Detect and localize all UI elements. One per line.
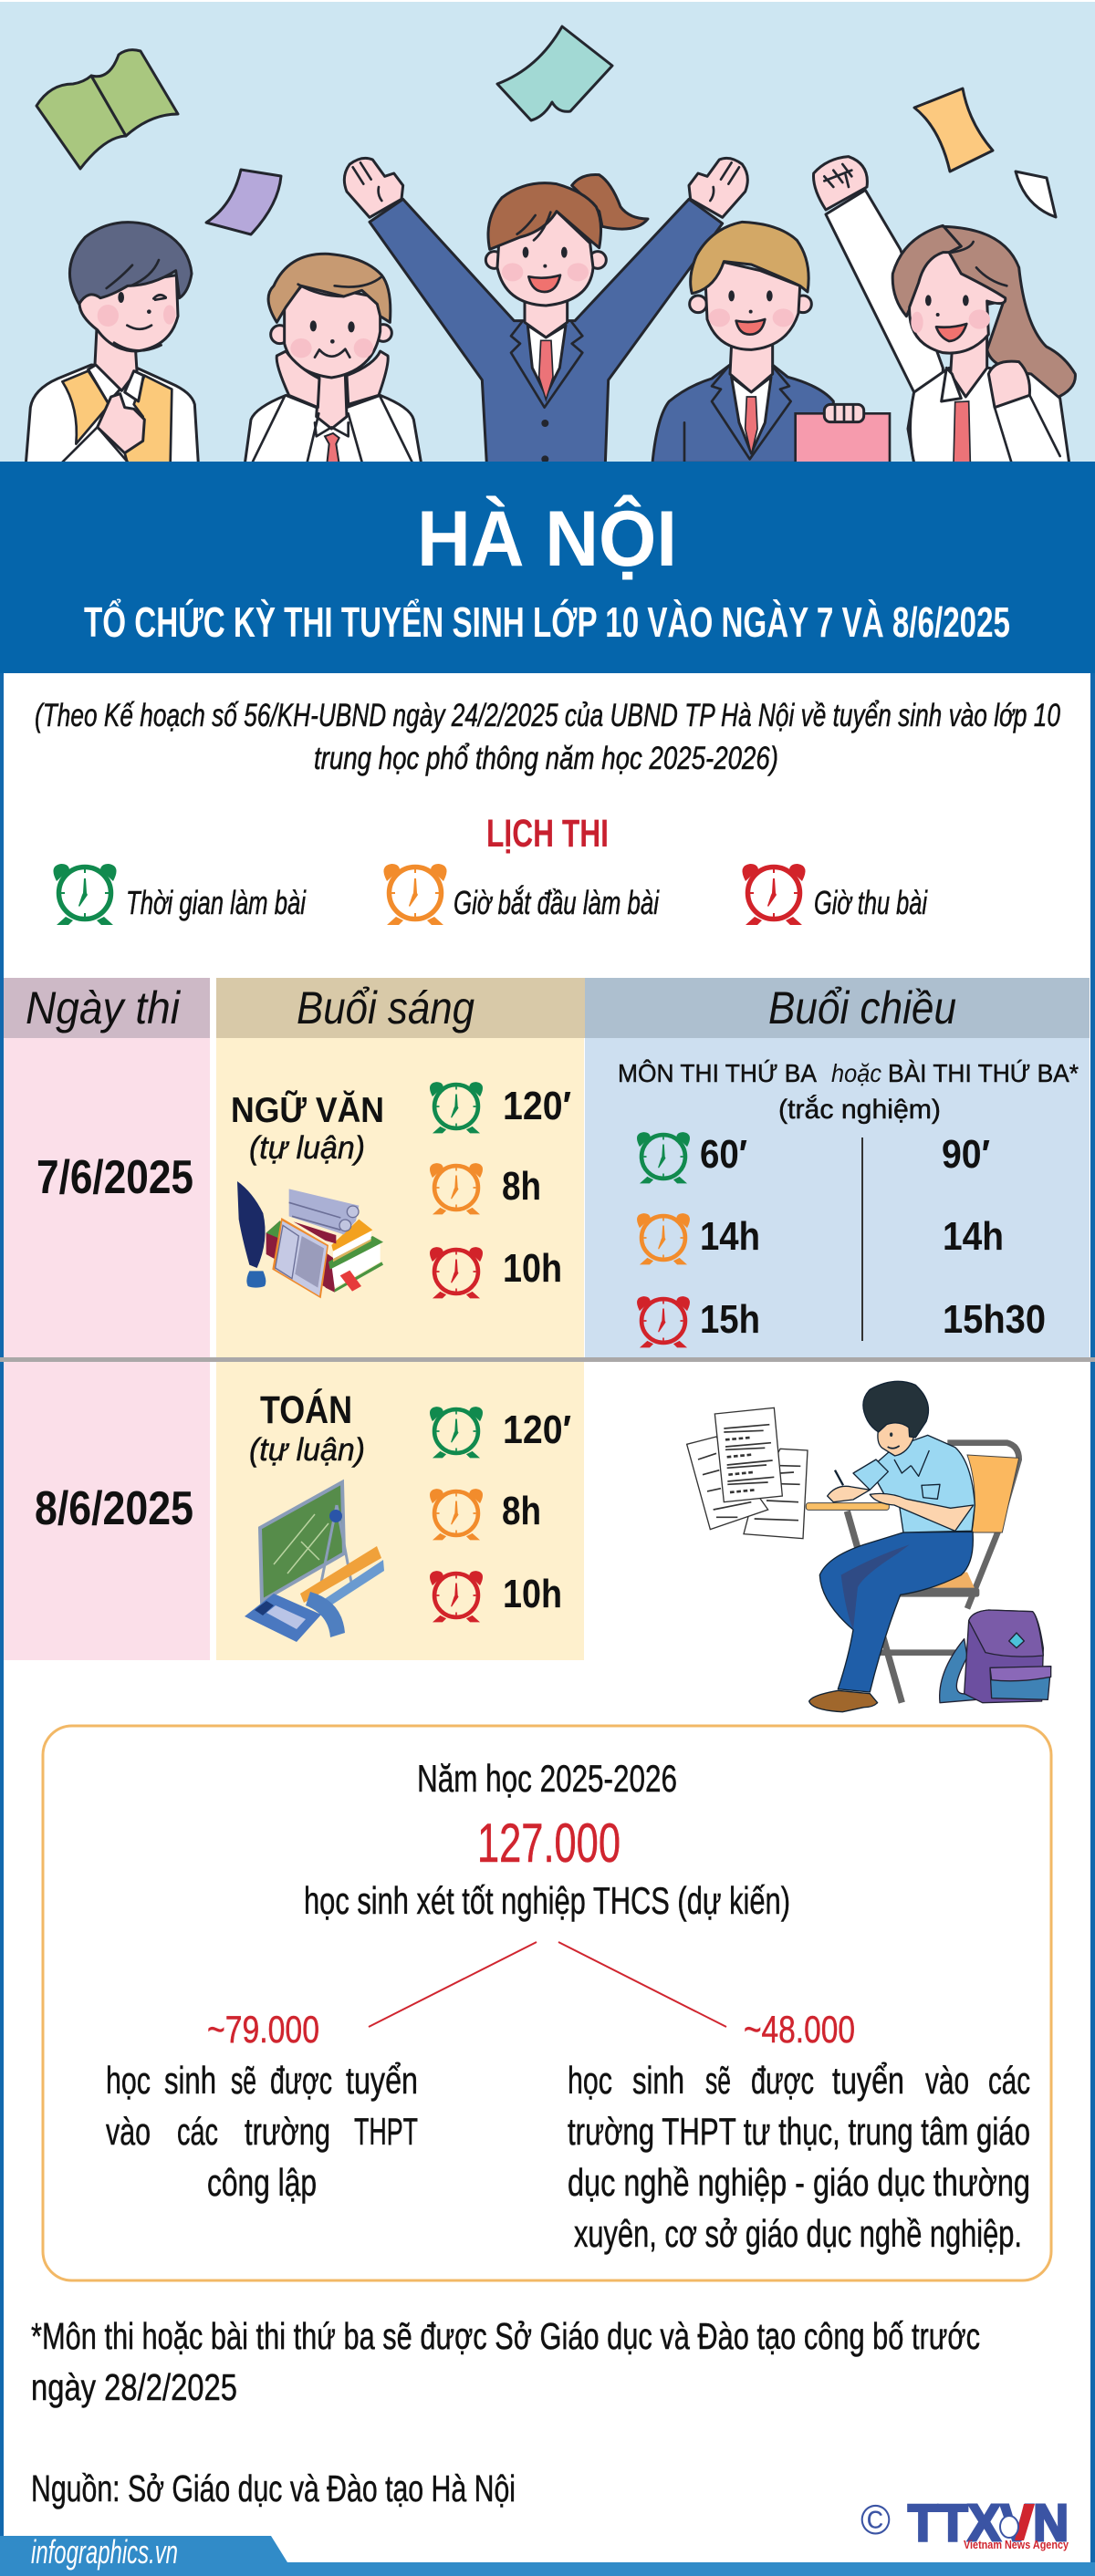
intro note: trung học phổ thông năm học 2025-2026) [314,741,778,776]
legend: end time [742,864,928,925]
hero illustration: celebrating students [0,2,1095,463]
flying teal paper [497,26,612,120]
afternoon heading: BÀI THI THỨ BA* [888,1059,1079,1087]
branch: private and vocational: sẽ [705,2059,731,2102]
legend [53,864,928,925]
option: third combined test: 15h30 [943,1297,1046,1342]
icon: blackboard, calculator, ruler [245,1482,384,1642]
school year: Năm học 2025-2026 [417,1757,677,1800]
afternoon heading [618,1059,1079,1125]
branch: public schools: các [177,2110,218,2153]
title banner [0,462,1095,673]
option: third combined test [942,1132,1046,1342]
total students description: học sinh xét tốt nghiệp THCS (dự kiến) [304,1879,790,1922]
times: mathematics: 10h [503,1572,562,1616]
column backgrounds [0,978,1095,1660]
date: 8/6/2025: 8/6/2025 [35,1482,193,1535]
branch: public schools [106,2008,418,2204]
branch: public schools: được [270,2059,332,2102]
flying orange paper [914,88,993,171]
chair [847,1443,1019,1703]
afternoon heading: (trắc nghiệm) [778,1095,941,1125]
option: third subject [637,1132,760,1347]
morning session: literature [231,1082,571,1298]
afternoon heading: hoặc [831,1059,881,1087]
intro note [35,698,1060,776]
logo: TTXVN: Vietnam News Agency [964,2538,1069,2551]
logo: TTXVN: TTXVN [908,2494,1069,2552]
student 2: hands on cheeks [245,254,422,463]
logo: TTXVN: © [860,2496,891,2543]
branch: public schools: tuyển [346,2059,418,2102]
branch: private and vocational: tuyển [832,2059,904,2102]
student 5: long hair, fist raised [813,157,1075,462]
option: third subject: 60′ [700,1132,747,1177]
legend: duration: Thời gian làm bài [126,884,307,921]
footer site name: infographics.vn [31,2533,178,2571]
branch: private and vocational: được [751,2059,814,2102]
branch: private and vocational: ~48.000 [744,2008,855,2051]
student 1: dark hair, winking [26,223,198,463]
branch: private and vocational: học [568,2059,612,2102]
times: mathematics: 8h [502,1489,541,1533]
flying book [36,50,178,169]
flying purple paper [206,170,281,234]
branch: public schools: sinh [164,2059,216,2102]
source: Nguồn: Sở Giáo dục và Đào tạo Hà Nội [31,2467,516,2509]
morning session: mathematics: (tự luận) [249,1432,365,1468]
icon: books and feather [237,1181,383,1298]
legend: start time [383,864,660,925]
flying white paper [1016,171,1056,217]
statistics panel [43,1726,1051,2280]
column headers: Buổi chiều [768,982,956,1034]
morning session: literature: (tự luận) [249,1130,365,1166]
times: literature: 120′ [503,1084,571,1128]
morning session: mathematics [245,1388,571,1642]
times: literature: 10h [503,1246,562,1291]
branch lines [369,1942,726,2027]
afternoon session [618,1059,1079,1347]
morning session: literature: NGỮ VĂN [231,1090,384,1130]
illustration: student writing exam at desk [687,1381,1051,1712]
column headers [26,982,956,1034]
schedule table [0,978,1095,1660]
branch: private and vocational [568,2008,1030,2255]
boy [809,1381,975,1712]
footnote: ngày 28/2/2025 [31,2366,237,2408]
legend: duration [53,864,307,925]
times: mathematics: 120′ [503,1407,571,1452]
student 4: blond hair with pink clipboard [652,222,890,462]
branch: private and vocational: vào [925,2059,969,2102]
branch: public schools: trường [245,2110,330,2153]
footnote [31,2315,980,2408]
exam papers [687,1407,808,1539]
times: literature: 8h [502,1164,541,1209]
legend: start time: Giờ bắt đầu làm bài [454,884,660,921]
option: third subject: 14h [700,1214,760,1259]
legend: end time: Giờ thu bài [814,884,928,921]
main heading: HÀ NỘI [417,495,677,583]
schedule heading: LỊCH THI [486,812,609,856]
desk top [806,1503,889,1510]
branch: private and vocational: sinh [632,2059,684,2102]
option: third subject: 15h [700,1297,760,1342]
morning session: mathematics: TOÁN [260,1388,352,1432]
branch: public schools: công lập [207,2161,317,2204]
backpack [940,1610,1051,1703]
branch: public schools: THPT [354,2110,418,2153]
student 3: center, arms raised [344,158,747,463]
branch: public schools: học [106,2059,151,2102]
column headers: Ngày thi [26,982,182,1034]
footer bar [0,2533,1095,2576]
branch: private and vocational: các [988,2059,1030,2102]
option: third combined test: 14h [943,1214,1004,1259]
branch: public schools: ~79.000 [207,2008,319,2051]
times: literature [430,1082,571,1298]
option: third combined test: 90′ [942,1132,990,1177]
branch: public schools: vào [106,2110,151,2153]
afternoon heading: MÔN THI THỨ BA [618,1059,817,1087]
branch: public schools: sẽ [231,2059,256,2102]
column headers: Buổi sáng [297,982,474,1034]
total students number: 127.000 [477,1813,620,1874]
date: 7/6/2025: 7/6/2025 [36,1151,193,1204]
times: mathematics [430,1407,571,1622]
